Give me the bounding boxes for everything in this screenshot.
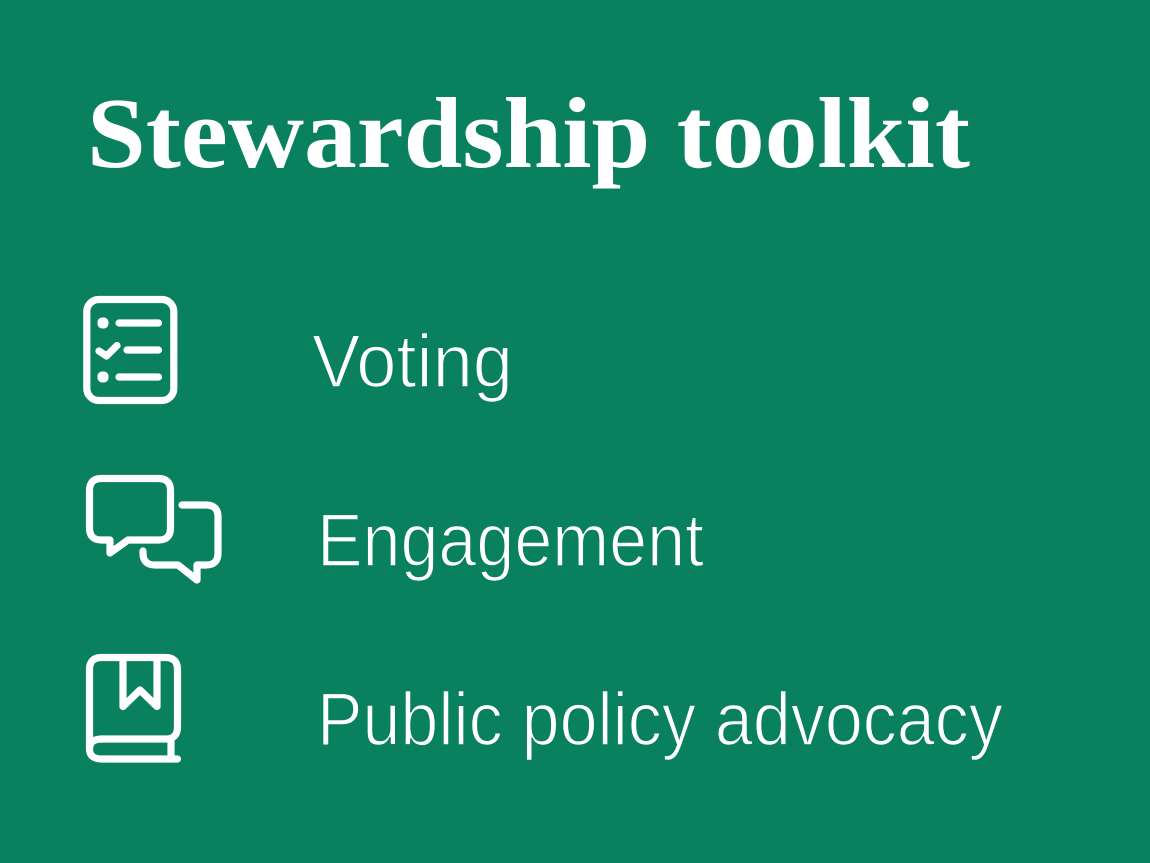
icon: engagement speech bubbles — [90, 478, 218, 580]
icon: voting checklist — [87, 300, 174, 400]
icon: public policy book — [90, 658, 178, 759]
label: voting: Voting — [312, 319, 513, 403]
label: public policy advocacy: Public policy advocacy — [317, 677, 1003, 761]
title: Stewardship toolkit — [87, 77, 970, 189]
label: engagement: Engagement — [317, 498, 704, 582]
